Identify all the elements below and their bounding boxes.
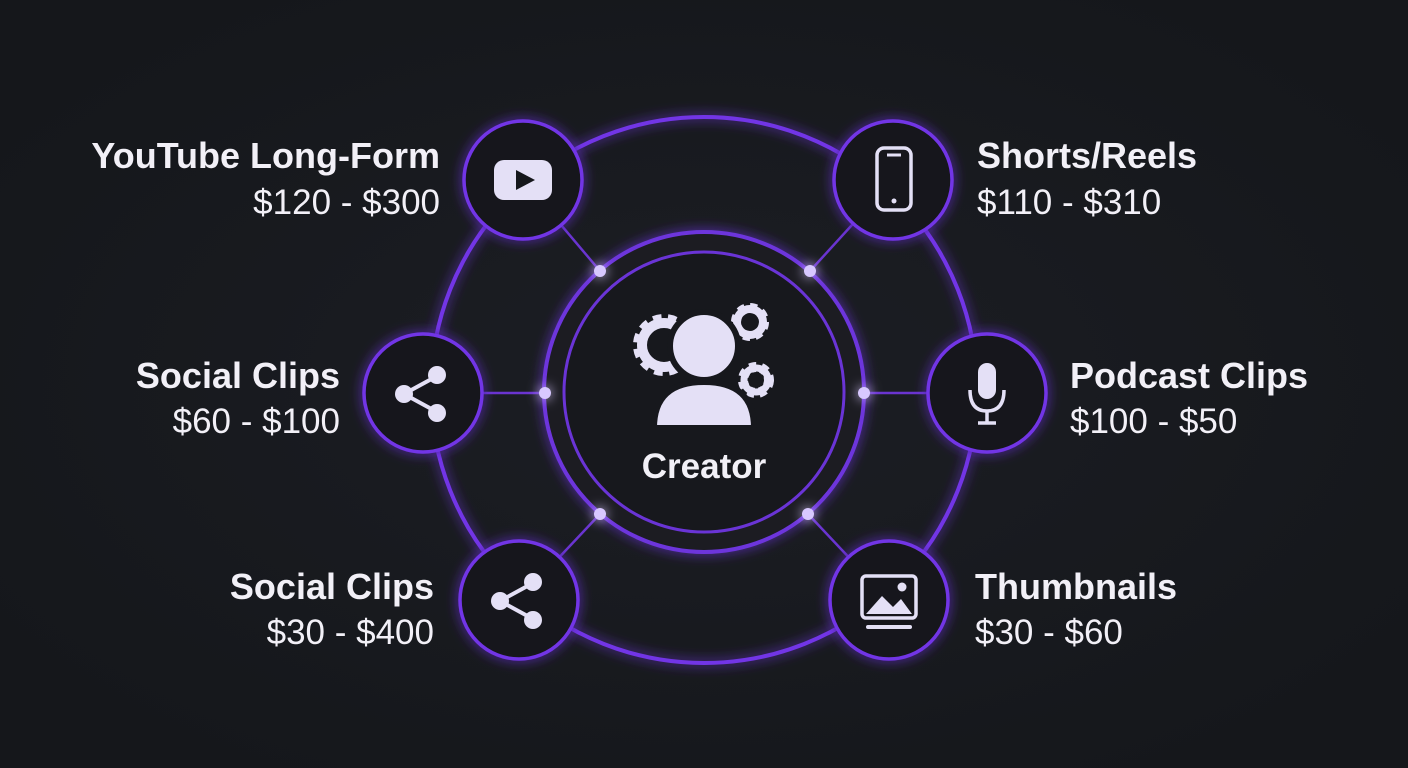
- label: Thumbnails: [975, 566, 1177, 652]
- dots: [539, 265, 870, 520]
- label: Creator: Creator: [642, 447, 767, 486]
- label: Thumbnails: $30 - $60: [975, 613, 1123, 652]
- label: Social Clips 2: Social Clips: [230, 566, 434, 607]
- connector lines: [423, 180, 987, 600]
- center hub: [544, 232, 864, 552]
- label: Podcast Clips: $100 - $50: [1070, 402, 1237, 441]
- label: YouTube Long-Form: YouTube Long-Form: [91, 135, 440, 176]
- label: Social Clips 1: [136, 355, 340, 441]
- label: Social Clips 1: Social Clips: [136, 355, 340, 396]
- icon: creator with gears: [638, 308, 769, 428]
- label: Social Clips 2: $30 - $400: [267, 613, 434, 652]
- node: Podcast: [928, 334, 1046, 452]
- label: Shorts/Reels: [977, 135, 1197, 222]
- label: Social Clips 1: $60 - $100: [173, 402, 340, 441]
- node: Shorts: [834, 121, 952, 239]
- label: Shorts/Reels: $110 - $310: [977, 183, 1161, 222]
- label: Shorts/Reels: Shorts/Reels: [977, 135, 1197, 176]
- node: Social Clips 1: [364, 334, 482, 452]
- node: Social Clips 2: [460, 541, 578, 659]
- label: YouTube Long-Form: [91, 135, 440, 222]
- outer ring: [431, 117, 977, 663]
- label: Podcast Clips: Podcast Clips: [1070, 355, 1308, 396]
- label: Social Clips 2: [230, 566, 434, 652]
- node: YouTube: [464, 121, 582, 239]
- node: Thumbnails: [830, 541, 948, 659]
- label: Podcast Clips: [1070, 355, 1308, 441]
- label: Thumbnails: Thumbnails: [975, 566, 1177, 607]
- label: YouTube Long-Form: $120 - $300: [253, 183, 440, 222]
